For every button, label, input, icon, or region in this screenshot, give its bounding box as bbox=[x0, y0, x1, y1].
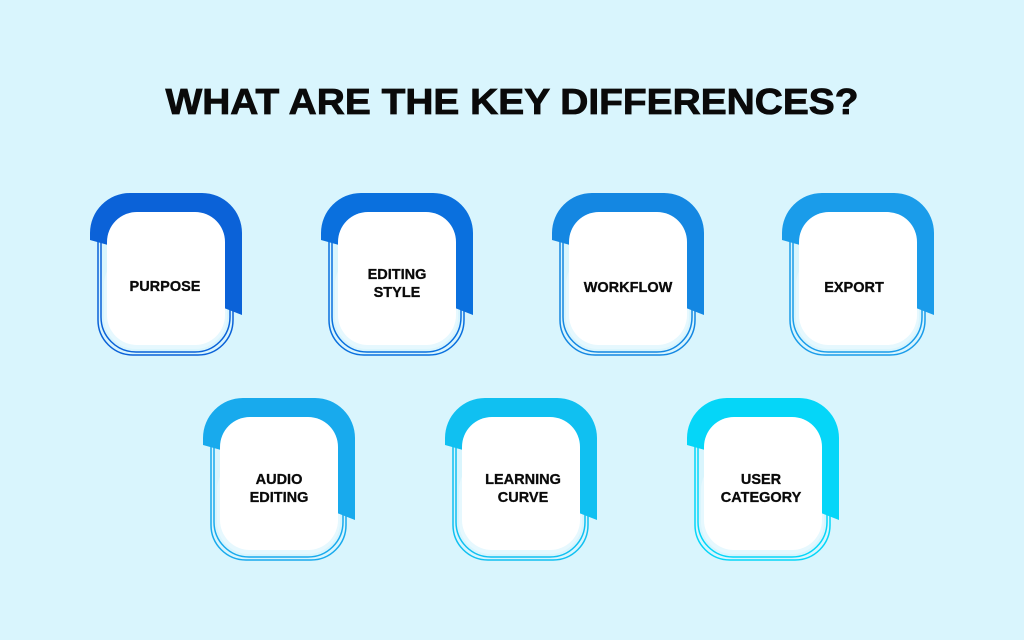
card: audio editing: EDITING bbox=[250, 490, 308, 506]
card: editing style: STYLE bbox=[374, 285, 421, 301]
card: audio editing: AUDIO bbox=[256, 472, 302, 488]
card: learning curve: LEARNING bbox=[485, 472, 561, 488]
card: learning curve: CURVE bbox=[498, 490, 549, 506]
card: learning curve bbox=[445, 398, 597, 560]
card: export: EXPORT bbox=[824, 280, 884, 296]
card: workflow bbox=[552, 193, 704, 355]
card: purpose: PURPOSE bbox=[130, 279, 201, 295]
card: user category bbox=[687, 398, 839, 560]
card: editing style bbox=[321, 193, 473, 355]
card: user category: USER bbox=[741, 472, 782, 488]
card: editing style: EDITING bbox=[368, 267, 426, 283]
card: purpose bbox=[90, 193, 242, 355]
card: workflow: WORKFLOW bbox=[584, 280, 673, 296]
title: WHAT ARE THE KEY DIFFERENCES? bbox=[166, 81, 858, 122]
card: audio editing bbox=[203, 398, 355, 560]
card: user category: CATEGORY bbox=[721, 490, 802, 506]
card: export bbox=[782, 193, 934, 355]
